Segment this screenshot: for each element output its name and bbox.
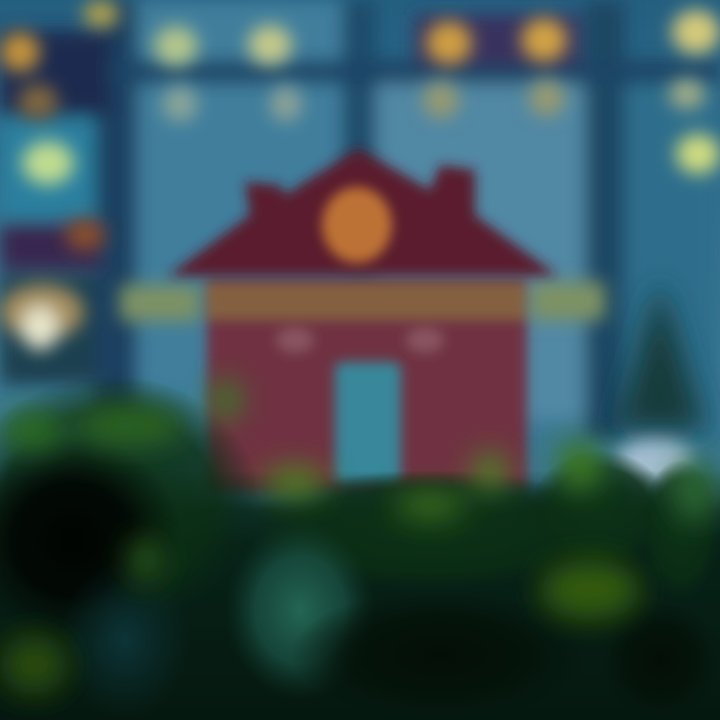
foliage highlights <box>0 380 719 695</box>
house <box>168 148 558 493</box>
house wall <box>205 278 527 493</box>
door <box>335 362 401 487</box>
house roof <box>168 148 558 276</box>
tree: dark conifer at right <box>615 280 705 430</box>
roof window <box>322 187 392 263</box>
foreground: dark green foliage <box>0 375 720 720</box>
windows: glowing lights <box>0 0 720 490</box>
